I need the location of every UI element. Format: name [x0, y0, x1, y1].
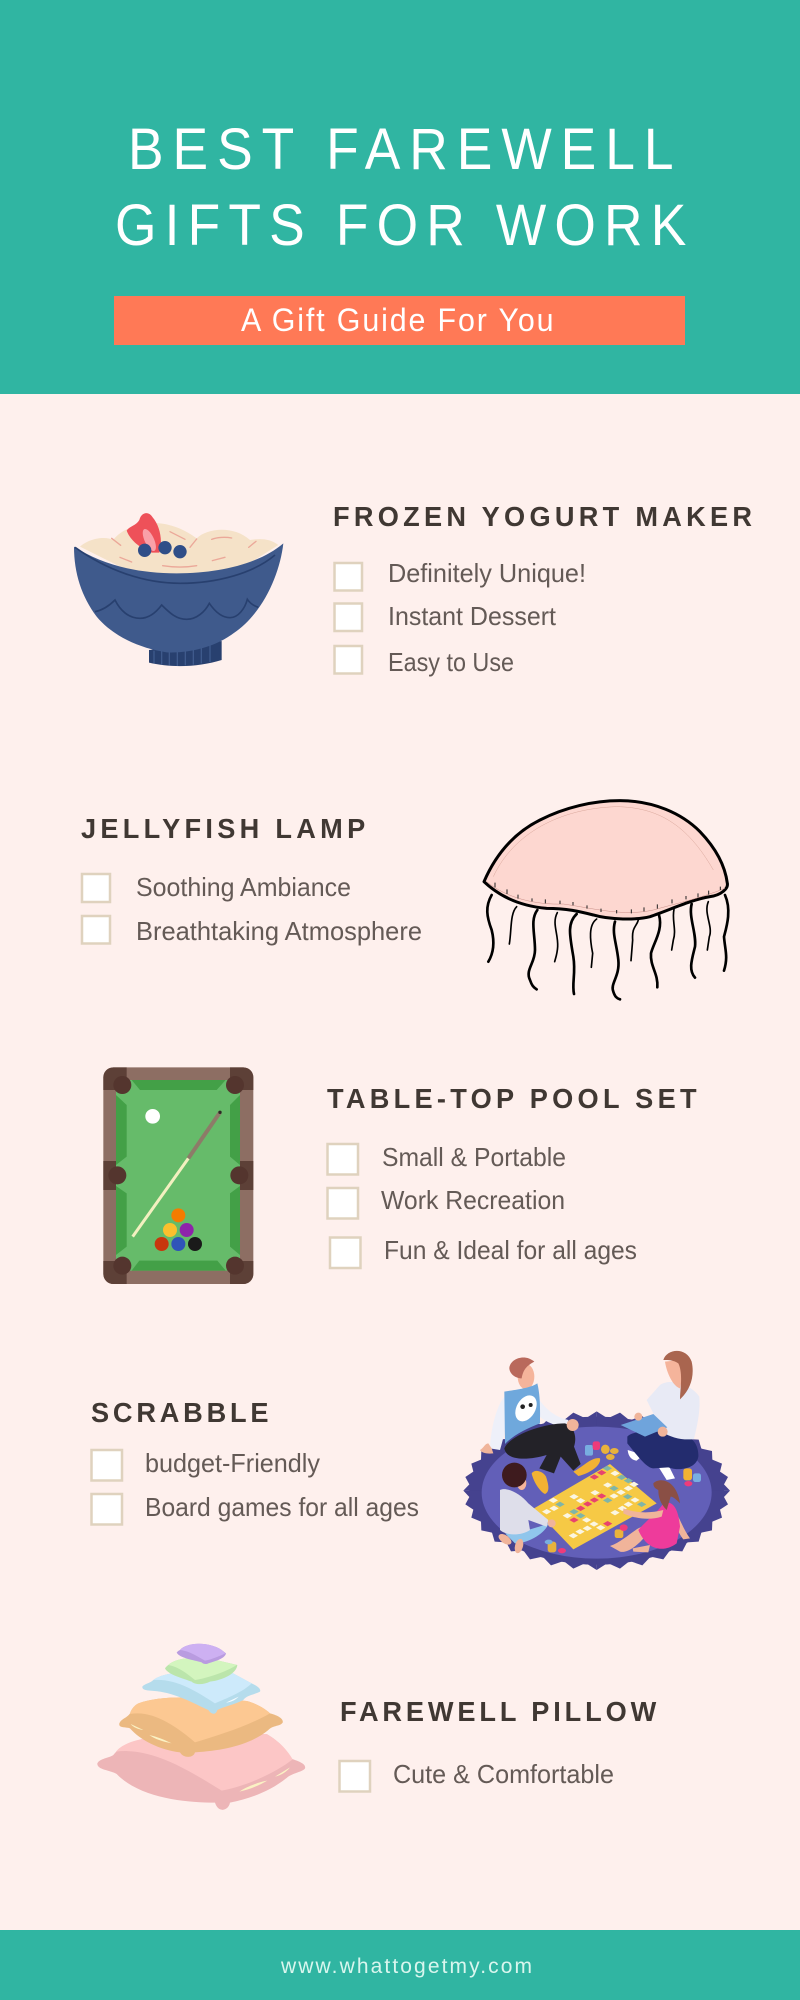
heading: JELLYFISH LAMP — [81, 813, 365, 844]
title — [115, 117, 686, 257]
boy — [497, 1463, 556, 1554]
checklist: Definitely Unique! — [388, 558, 586, 588]
checklist: Board games for all ages — [145, 1492, 419, 1522]
title: GIFTS FOR WORK — [115, 193, 686, 257]
man — [480, 1357, 600, 1494]
checklist: Breathtaking Atmosphere — [136, 916, 422, 946]
subtitle ribbon: A Gift Guide For You — [241, 302, 554, 338]
icon: pool table — [103, 1067, 253, 1284]
header banner — [0, 0, 800, 394]
icon: pillow stack — [97, 1644, 305, 1810]
panel: table-top pool set — [327, 1083, 697, 1268]
checklist — [92, 1448, 419, 1524]
checklist: Cute & Comfortable — [393, 1759, 614, 1789]
panel: frozen yogurt maker — [333, 501, 752, 677]
heading: FAREWELL PILLOW — [340, 1696, 656, 1727]
heading: SCRABBLE — [91, 1397, 269, 1428]
panel: farewell pillow — [340, 1696, 656, 1792]
checklist: budget-Friendly — [145, 1448, 320, 1478]
woman — [621, 1351, 700, 1480]
checklist: Easy to Use — [388, 647, 514, 677]
green pillow — [165, 1658, 237, 1684]
icon: frozen yogurt bowl — [74, 513, 283, 666]
checklist — [328, 1142, 637, 1268]
checklist: Fun & Ideal for all ages — [384, 1235, 637, 1265]
orange pillow — [119, 1697, 283, 1757]
girl — [610, 1480, 690, 1552]
heading: FROZEN YOGURT MAKER — [333, 501, 752, 532]
icon: jellyfish lamp — [484, 801, 728, 999]
checklist — [82, 872, 422, 946]
panel: jellyfish lamp — [81, 813, 422, 946]
footer band — [0, 1930, 800, 2000]
checklist — [334, 558, 586, 677]
checklist: Small & Portable — [382, 1142, 566, 1172]
game pieces — [545, 1441, 701, 1553]
website url: www.whattogetmy.com — [280, 1955, 532, 1978]
purple pillow — [177, 1644, 226, 1664]
checklist: Work Recreation — [381, 1185, 565, 1215]
blue pillow — [142, 1671, 260, 1714]
title: BEST FAREWELL — [128, 117, 674, 181]
icon: family playing board game — [463, 1351, 730, 1570]
panel: scrabble — [91, 1397, 419, 1524]
pink pillow — [97, 1734, 305, 1810]
heading: TABLE-TOP POOL SET — [327, 1083, 697, 1114]
checklist: Soothing Ambiance — [136, 872, 351, 902]
checklist: Instant Dessert — [388, 601, 557, 631]
subtitle ribbon — [114, 296, 685, 345]
